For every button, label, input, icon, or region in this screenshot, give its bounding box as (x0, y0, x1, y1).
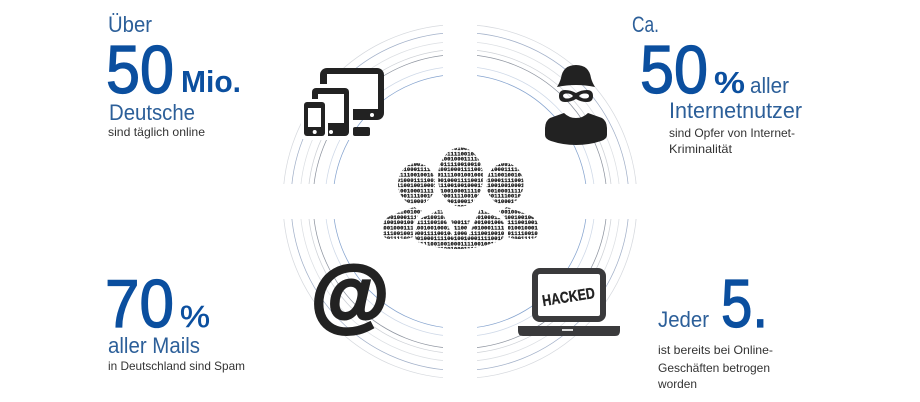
central binary cloud of people: 1110010010001111001001000111100100100011110010010001111001001 (380, 246, 585, 253)
central binary cloud of people: 1110010010001111001001000111100100100011110010010001111001001 (380, 156, 585, 163)
stat block: 50 % aller Internetnutzer: aller (750, 73, 789, 98)
stat block: 50 Mio. Deutsche: sind täglich online (108, 125, 205, 139)
stat block: 70 % aller Mails: % (180, 299, 210, 334)
stat block: 50 Mio. Deutsche: Deutsche (109, 100, 195, 125)
icon: devices (301, 68, 384, 140)
central binary cloud of people: 0100100100011110010010001111001001000111100100100011110010010 (380, 240, 585, 247)
central binary cloud of people: 0100011110010010001111001001000111100100100011110010010001111 (380, 172, 585, 178)
central binary cloud of people: 1001001000111100100100011110010010001111001001000111100100100 (380, 177, 585, 184)
icon: hacked laptop (518, 271, 620, 336)
central binary cloud of people: 1110010010001111001001000111100100100011110010010001111001001 (380, 187, 585, 194)
central binary cloud of people: 1001111001001000111100100100011110010010001111001001000111100 (380, 209, 585, 216)
stat block: 50 % aller Internetnutzer: Kriminalität (669, 142, 733, 156)
stat block: Jeder 5.: worden (657, 377, 697, 391)
central binary cloud of people: 1001000111100100100011110010010001111001001000111100100100011 (380, 224, 585, 232)
laptop screen label: HACKED (541, 285, 596, 310)
central binary cloud of people: 0100100011110010010001111001001000111100100100011110010010001 (380, 214, 585, 221)
stat block: 50 % aller Internetnutzer (632, 12, 802, 156)
central binary cloud of people: 0001111001001000111100100100011110010010001111001001000111100 (380, 235, 585, 242)
central binary cloud of people: 0010001111001001000111100100100011110010010001111001001000111 (380, 203, 585, 210)
stat block: 70 % aller Mails: in Deutschland sind Spam (108, 359, 245, 373)
central binary cloud of people: 1001000111100100100011110010010001111001001000111100100100011 (380, 150, 585, 157)
stat block: Jeder 5.: 5. (721, 266, 768, 342)
stat block: 50 Mio. Deutsche: Über (108, 12, 152, 37)
stat block: 50 % aller Internetnutzer: 50 (640, 32, 708, 108)
central binary cloud of people: 0010001111001001000111100100100011110010010001111001001000111 (380, 161, 585, 168)
stat block: 70 % aller Mails: 70 (105, 266, 174, 342)
infographic canvas (108, 13, 802, 388)
stat block: Jeder 5.: Geschäften betrogen (658, 361, 770, 375)
central binary cloud of people: 1100100100011110010010001111001001000111100100100011110010010 (380, 219, 585, 226)
stat block: 70 % aller Mails: aller Mails (108, 333, 200, 358)
central binary cloud of people: 0100111100100100011110010010001111001001000111100100100011110 (380, 145, 585, 152)
stat block: Jeder 5.: Jeder (658, 307, 709, 332)
stat block: 50 Mio. Deutsche: Mio. (181, 64, 241, 99)
icon: masked thief (545, 65, 607, 145)
stat block: 50 % aller Internetnutzer: Ca. (632, 12, 659, 37)
stat block: Jeder 5. (657, 266, 773, 391)
central binary cloud of people (383, 148, 538, 249)
icon: at sign: @ (311, 250, 389, 339)
stat block: 50 % aller Internetnutzer: Internetnutzer (669, 98, 802, 123)
stat block: 50 Mio. Deutsche (106, 12, 241, 139)
stat block: 50 Mio. Deutsche: 50 (106, 32, 174, 108)
concentric circle arcs (283, 24, 637, 378)
stat block: Jeder 5.: ist bereits bei Online- (658, 343, 773, 357)
central binary cloud of people: 1111001001000111100100100011110010010001111001001000111100100 (380, 230, 585, 237)
stat block: 50 % aller Internetnutzer: % (714, 65, 745, 100)
central binary cloud of people: 1100100100011110010010001111001001000111100100100011110010010 (380, 166, 585, 173)
stat block: 70 % aller Mails (105, 266, 245, 373)
central binary cloud of people: 1111001001000111100100100011110010010001111001001000111100100 (380, 198, 585, 205)
central binary cloud of people: 0100100011110010010001111001001000111100100100011110010010001 (380, 193, 585, 200)
stat block: 50 % aller Internetnutzer: sind Opfer von Internet- (669, 126, 795, 140)
central binary cloud of people: 0001111001001000111100100100011110010010001111001001000111100 (380, 182, 585, 189)
